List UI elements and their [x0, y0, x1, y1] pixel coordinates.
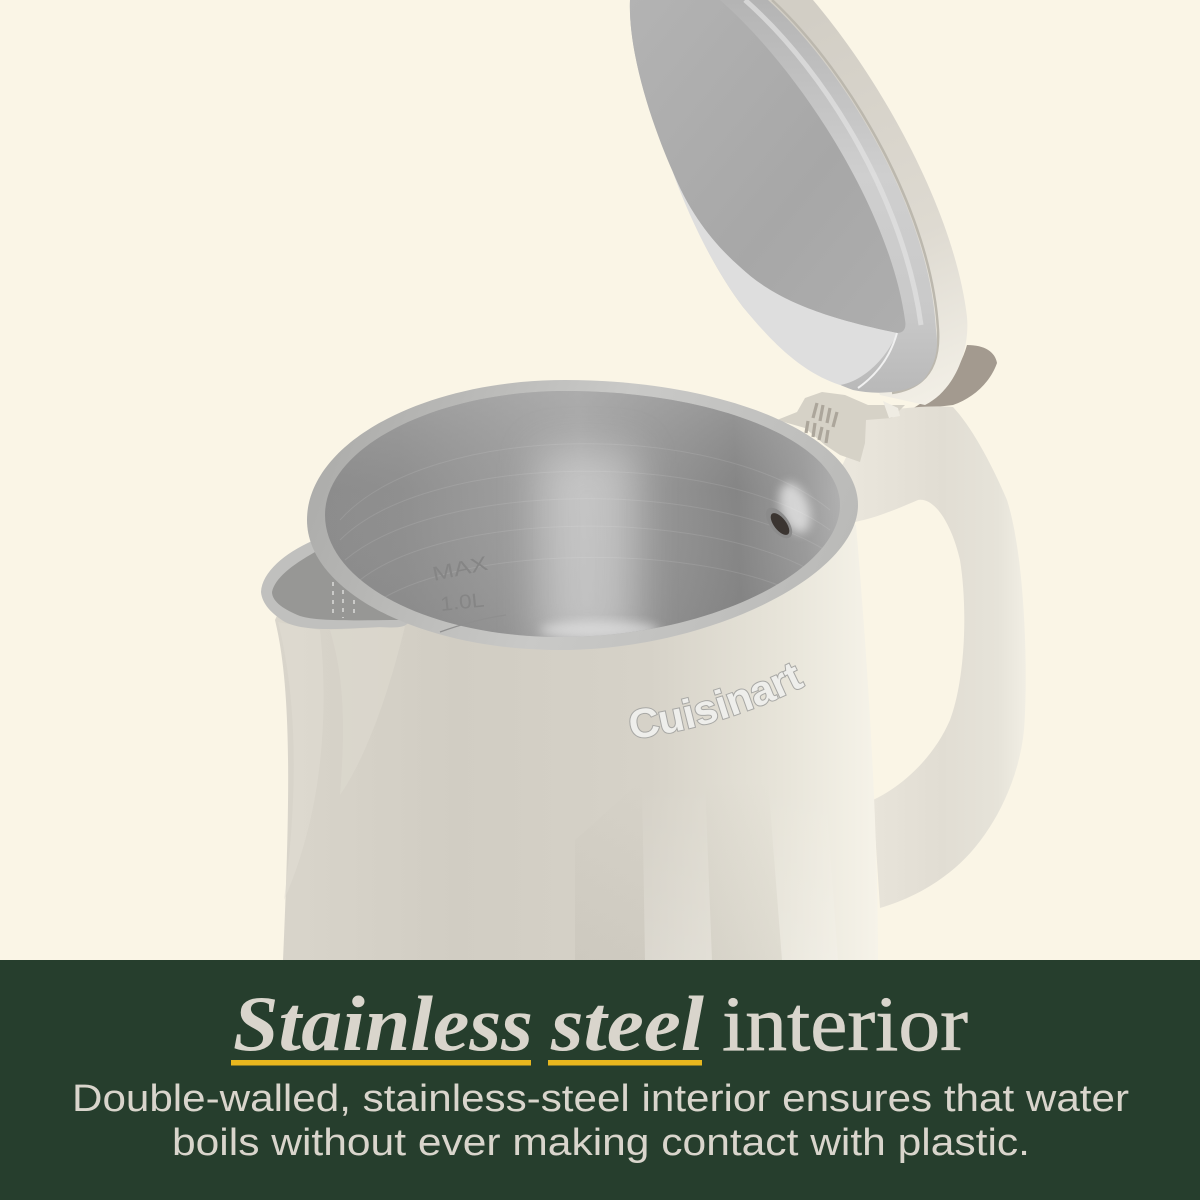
body flutes: [575, 780, 645, 960]
bottom banner: [0, 960, 1200, 1200]
lid light band: [672, 170, 897, 385]
steel rim: [307, 380, 858, 650]
title: Stainless: [233, 980, 533, 1067]
lid seam: [772, 0, 938, 393]
lid flat disc: [630, 0, 905, 333]
lid outer shell: [740, 0, 967, 405]
kettle body: [275, 500, 878, 960]
capacity markings: 1.0L: [439, 589, 485, 616]
title: steel: [550, 980, 704, 1067]
description: [72, 1078, 1129, 1164]
brand logo: Cuisinart: [629, 662, 806, 738]
handle: [840, 406, 1026, 908]
capacity markings: MAX: [430, 553, 490, 586]
description: boils without ever making contact with plastic.: [172, 1122, 1030, 1164]
description: Double-walled, stainless-steel interior ensures that water: [72, 1078, 1129, 1120]
hinge: [777, 392, 905, 462]
title underlines: [231, 1060, 702, 1066]
kettle illustration: [261, 0, 1026, 960]
lid tab: [910, 345, 997, 410]
title: interior: [722, 980, 968, 1067]
kettle interior: [325, 391, 840, 650]
spout crease: [330, 626, 405, 795]
spout: [261, 541, 409, 629]
vent hole: [761, 503, 797, 543]
lid steel underside: [630, 0, 937, 393]
capacity markings: [430, 553, 506, 632]
title: [233, 980, 968, 1067]
